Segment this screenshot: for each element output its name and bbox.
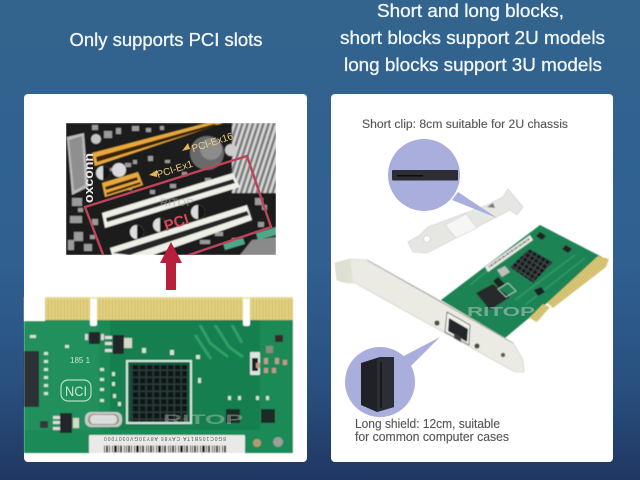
card notches: [90, 316, 97, 326]
serial strip: [485, 235, 533, 272]
watermark: RITOP: [467, 304, 536, 319]
PCIe x1 slot: [102, 172, 143, 197]
heading: right: long blocks support 3U models: [344, 55, 602, 75]
crystal: [85, 412, 122, 427]
RJ45 port: [445, 312, 470, 345]
panel: bracket options: [331, 94, 613, 462]
card body: [441, 225, 602, 338]
chips: [476, 284, 510, 310]
motherboard photo: PCI-Ex1: [156, 159, 195, 181]
watermark: RITOP: [163, 411, 243, 427]
LEDs: [253, 439, 261, 447]
heading: right: short blocks support 2U models: [340, 28, 605, 48]
short bracket: [408, 189, 523, 253]
silk print: 185 1: [70, 356, 91, 365]
heatsink: [126, 360, 192, 424]
arrow: slot to card: [160, 242, 182, 290]
red highlight box: [85, 156, 271, 257]
caption: long shield: Long shield: 12cm, suitable: [355, 417, 500, 431]
chips: [24, 351, 39, 407]
PCI card photo: [24, 297, 299, 457]
logo: [498, 283, 516, 297]
icon: bracket port edge: [392, 170, 458, 180]
callout: long bracket use: [345, 337, 440, 417]
network card with long bracket: [335, 225, 609, 372]
caption: short clip: Short clip: 8cm suitable for 2U chassis: [362, 119, 568, 131]
motherboard photo: [66, 123, 276, 257]
heading: right: [340, 1, 605, 75]
NCI logo: NCI: [65, 383, 87, 399]
gold fingers: [547, 256, 609, 308]
screws: [434, 320, 440, 326]
panel: PCI slot support: [24, 94, 307, 462]
crystal: [497, 266, 510, 277]
motherboard photo: PCI: [162, 211, 191, 235]
capacitors: [96, 166, 110, 180]
caption: long shield: for common computer cases: [355, 430, 509, 444]
heatsink: [510, 249, 553, 283]
gold fingers: [45, 297, 90, 320]
silk labels on the motherboard: oxconn: [81, 153, 96, 203]
serial label text: 8G0C105B1TA CAY85 A8Y30GV0307000: [104, 435, 226, 441]
serial label: [89, 435, 245, 453]
callout: short bracket detail: [388, 139, 497, 218]
PCIe x16 slot: [92, 123, 223, 166]
icon: PC tower: [361, 357, 394, 412]
heading: left: Only supports PCI slots: [70, 30, 262, 50]
long bracket: [335, 259, 524, 372]
motherboard photo: PCI-Ex16: [191, 131, 235, 155]
NCI logo: [61, 380, 91, 401]
green connectors: [223, 238, 245, 250]
motherboard photo: RITOP: [160, 197, 193, 209]
heading: right: Short and long blocks,: [377, 1, 564, 21]
white PCI slots: [102, 173, 240, 228]
caption: long shield: [355, 417, 509, 444]
